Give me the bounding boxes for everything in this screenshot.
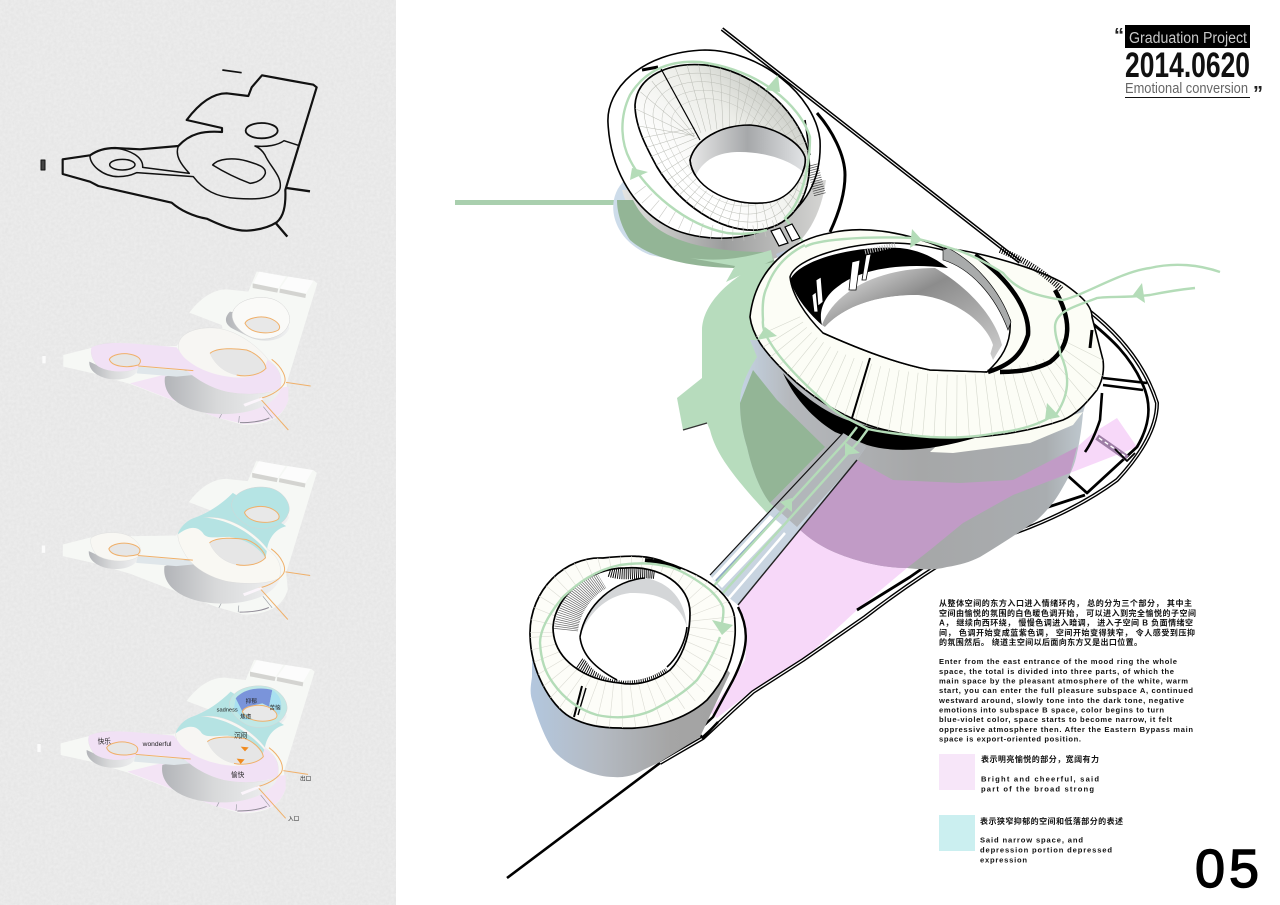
legend: bright and cheerful: 表示明亮愉悦的部分，宽阔有力 [981,754,1099,764]
title block: Graduation Project [1129,30,1248,47]
funnel grid [644,73,808,222]
ribs on rim [770,330,1090,408]
white opening [580,578,687,681]
dome wall [531,660,730,777]
legend: bright and cheerful: Bright and cheerful, said [981,774,1099,784]
plan diagram: labelled emotion map [37,660,315,822]
inner wall shading [580,578,687,637]
English description: space is export-oriented position. [939,734,1081,744]
legend: narrow depressed: Said narrow space, and [980,836,1083,844]
green circulation routes [710,237,1220,593]
icon: orange direction arrows [237,747,249,764]
title tag [1125,25,1250,48]
ring top surface [750,230,1103,438]
central opening [690,125,805,203]
green ground strip [617,200,775,282]
interior wall gradient [822,268,1002,360]
opening quote: “ [1114,25,1124,47]
funnel [553,568,690,684]
main ring: dome wall [740,340,1100,569]
legend: narrow depressed: 表示狭窄抑郁的空间和低落部分的表述 [980,816,1123,826]
emotion labels [98,697,311,822]
legend: narrow depressed: expression [980,856,1027,864]
arrows: main ring [757,229,1145,512]
Chinese description [939,598,1196,647]
emotion labels: 焦虑 [240,713,252,721]
lower rim ticks [640,190,780,234]
English description: westward around, slowly tone into the dark tone, negative [938,696,1184,705]
emotion labels: 愉快 [231,770,245,779]
plan diagram: cyan depressed route [42,461,317,619]
emotion labels: wonderful [142,741,172,748]
white opening [825,295,993,372]
legend: bright and cheerful: part of the broad strong [981,784,1094,794]
Chinese description: 间， 色调开始变成蓝紫色调， 空间开始变得狭窄， 令人感受到压抑 [939,628,1195,638]
emotion labels: 苦恼 [269,704,281,712]
pink ground band [710,418,1137,718]
English description: space, the total is divided into three parts, of which the [939,667,1174,676]
black arcs to the right [852,250,1092,418]
hatching inside funnel [566,570,668,682]
page number: 05 [1195,839,1259,899]
ring shadow and wall [613,180,700,265]
swatch pink [939,754,975,790]
cream band under rim [930,412,1083,453]
emotion labels: sadness [217,707,238,713]
inner interior floor [790,243,1010,372]
Chinese description: A， 继续向西环绕， 慢慢色调进入暗调， 进入子空间 B 负面情绪空 [939,618,1193,628]
title block [1114,25,1263,105]
emotion labels: 入口 [288,815,299,822]
dark green overlap [740,370,825,503]
English description: oppressive atmosphere then. After the Eastern Bypass main [939,725,1193,734]
Chinese description: 的氛围然后。 绕道主空间以后面向东方又是出口位置。 [939,637,1142,647]
emotion labels: 快乐 [98,736,111,745]
rim ribs [541,562,712,705]
arrow: lower ring [712,620,733,635]
small link bridge [771,224,800,258]
green circulation loop [622,62,810,247]
closing quote: ” [1253,83,1263,105]
main ring: top surface and interior [710,229,1220,593]
emotion labels: 出口 [300,774,311,782]
emotion labels: 沉闷 [234,731,248,740]
plan diagram: pink joyful route [42,272,317,430]
funnel interior [635,65,809,230]
English description: start, you can enter the full pleasure subspace A, continued [939,686,1193,695]
green shadow sweep [455,200,850,513]
black strokes [574,560,680,717]
purple overlap [797,447,1077,568]
main bridge to lower ring [710,433,866,605]
legend: narrow depressed: depression portion depressed [980,846,1112,854]
emotion labels: 抑郁 [246,697,257,705]
long diagonal road [722,29,1020,262]
black underside crescent [783,373,975,450]
green circulation loop [540,563,723,717]
Chinese description: 空间由愉悦的氛围的白色暖色调开始， 可以进入到完全愉悦的子空间 [939,608,1196,618]
seam line and hatching [642,67,820,195]
English description [938,657,1193,744]
arrows: top ring [630,75,780,180]
legend: bright and cheerful [939,754,1099,794]
English description: Enter from the east entrance of the mood ring the whole [939,657,1177,666]
English description: emotions into subspace B space, color begins to turn [939,706,1164,714]
sweeping road [507,113,1157,878]
Chinese description: 从整体空间的东方入口进入情绪环内， 总的分为三个部分， 其中主 [939,598,1192,608]
English description: blue-violet color, space starts to become narrow, it felt [939,715,1172,724]
ring surface [530,556,735,728]
legend: narrow depressed [939,815,1123,864]
gray strip [943,248,1011,330]
ring top surface [608,50,820,238]
subtitle: Emotional conversion [1125,80,1248,97]
panel: textured sidebar [0,0,396,905]
top ring: subspace A [608,50,826,282]
swatch cyan [939,815,975,851]
site: road lines and pink ground [507,29,1157,878]
black crescent with slats [790,245,948,325]
lower ring: joy space [530,556,735,777]
plan diagram: black outline [41,70,317,237]
English description: main space by the pleasant atmosphere of the white, warm [939,676,1188,686]
